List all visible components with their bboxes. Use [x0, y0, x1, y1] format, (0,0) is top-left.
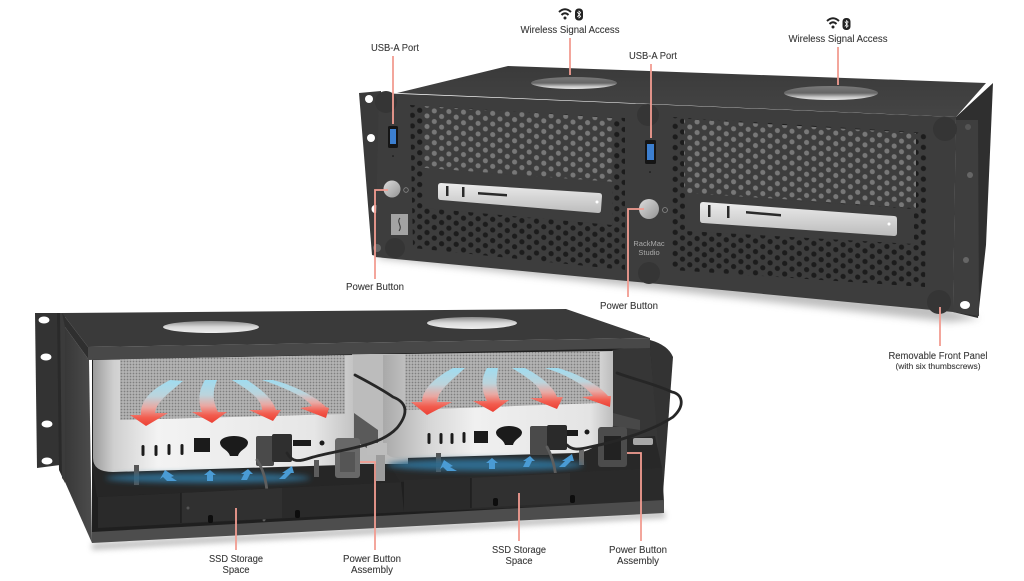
USB-A port left	[388, 126, 398, 157]
callout: wireless signal access left: Wireless Signal Access	[520, 25, 620, 36]
ports	[142, 436, 324, 456]
callout: SSD storage space left: Space	[222, 565, 250, 576]
wireless opening right	[427, 317, 517, 329]
callout: power button assembly right: Assembly	[617, 556, 659, 567]
callout: removable front panel: Removable Front Panel	[888, 351, 988, 362]
icon: wifi and bluetooth	[827, 18, 850, 30]
callout: power button assembly right	[609, 453, 667, 567]
power button assembly left	[335, 438, 387, 481]
tray left	[92, 455, 401, 497]
perforation right	[672, 117, 927, 287]
Sonnet logo	[391, 214, 408, 235]
RackMac Studio wordmark: RackMac	[633, 239, 665, 248]
wireless opening left	[163, 321, 259, 333]
callout: SSD storage space left	[209, 508, 263, 576]
left rack flange	[35, 313, 65, 483]
top plate front lip	[88, 338, 650, 360]
callout: removable front panel: (with six thumbscrews)	[896, 362, 981, 371]
callout: USB-A port center	[629, 51, 677, 138]
callout: SSD storage space right: Space	[506, 556, 533, 567]
right side flange	[953, 83, 993, 318]
callout: USB-A port left: USB-A Port	[371, 43, 419, 54]
USB-A port center	[645, 140, 656, 173]
callout: power button assembly left	[343, 462, 401, 576]
Mac Studio front right	[700, 202, 897, 236]
callout: wireless signal access left	[520, 8, 620, 75]
perforation left	[410, 105, 625, 270]
red airflow arrows right	[411, 368, 611, 415]
Mac Studio right	[383, 351, 613, 472]
callout: power button assembly left: Power Button	[343, 554, 401, 565]
blue airflow arrows	[160, 454, 574, 481]
red airflow arrows left	[130, 380, 329, 426]
top plate	[62, 309, 650, 347]
wireless opening left	[531, 77, 617, 89]
callout: removable front panel	[888, 307, 988, 371]
power connectors and cables	[256, 373, 681, 520]
callout: power button assembly left: Assembly	[351, 565, 393, 576]
standoffs	[134, 465, 139, 485]
callout: power button assembly right: Power Button	[609, 545, 667, 556]
front panel	[375, 93, 956, 312]
storage bay right	[404, 468, 664, 512]
Mac Studio left	[93, 355, 353, 485]
power button center	[639, 199, 668, 219]
wireless opening right	[784, 86, 878, 100]
callout: SSD storage space left: SSD Storage	[209, 554, 263, 565]
power button assembly right	[598, 413, 653, 467]
callout: power button left	[346, 190, 404, 293]
tray right	[385, 436, 662, 482]
callout: SSD storage space right: SSD Storage	[492, 545, 546, 556]
top face	[397, 66, 986, 117]
left rack flange	[359, 91, 381, 257]
callout: wireless signal access right: Wireless Signal Access	[788, 34, 888, 45]
RackMac Studio wordmark: Studio	[638, 248, 660, 257]
right side wall	[600, 340, 673, 510]
icon: wifi and bluetooth	[559, 8, 583, 20]
callout: power button center	[600, 209, 658, 312]
callout: power button center: Power Button	[600, 301, 658, 312]
callout: USB-A port center: USB-A Port	[629, 51, 677, 62]
blue airflow glow	[106, 459, 583, 483]
panel: closed rack unit, front view	[359, 66, 993, 322]
standoffs	[436, 453, 441, 472]
callout: wireless signal access right	[788, 18, 888, 85]
thumbscrews	[373, 91, 957, 314]
gap between units	[352, 354, 408, 464]
base front lip	[92, 500, 664, 543]
storage bay left	[98, 482, 404, 528]
interior	[92, 345, 662, 535]
callout: USB-A port left	[371, 43, 419, 124]
panel: open rack unit, rear view	[35, 309, 681, 550]
ports	[428, 426, 590, 445]
power button left	[384, 180, 408, 198]
callout: SSD storage space right	[492, 493, 546, 567]
callout: power button left: Power Button	[346, 282, 404, 293]
RackMac Studio wordmark	[633, 239, 665, 257]
Mac Studio front left	[438, 183, 602, 213]
left side wall	[65, 327, 92, 543]
